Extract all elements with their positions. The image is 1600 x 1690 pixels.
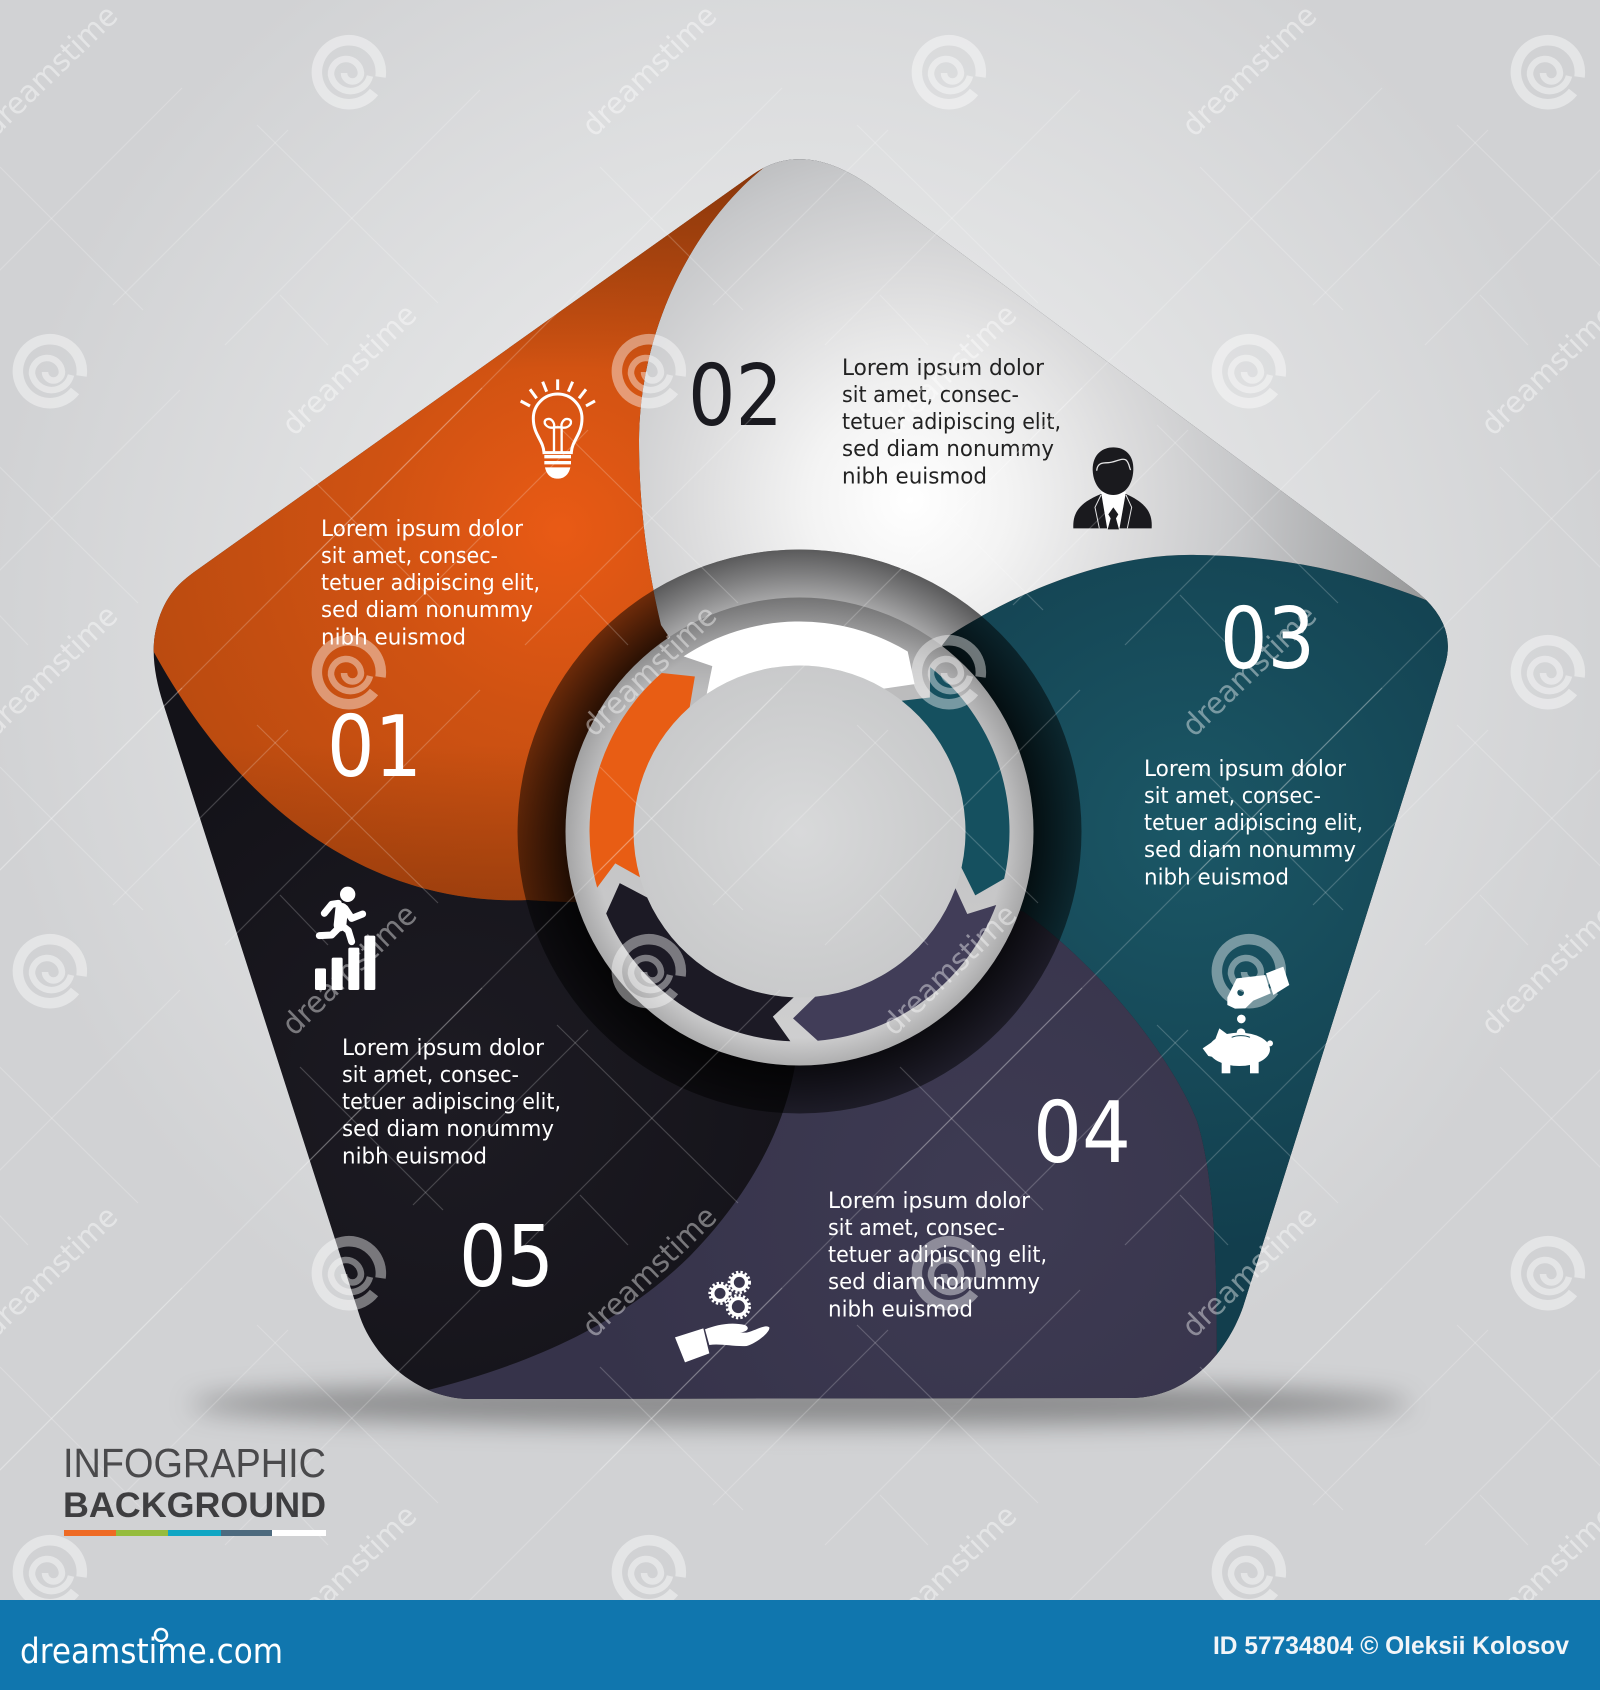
arrow: black xyxy=(583,875,812,1070)
watermark overlay: dreamstime xyxy=(275,897,424,1043)
number 04: 04 xyxy=(1033,1084,1131,1183)
text block 04: Lorem ipsum dolor xyxy=(828,1189,1031,1214)
watermark overlay: dreamstime xyxy=(275,1498,424,1644)
text block 01: Lorem ipsum dolor xyxy=(321,517,524,542)
text block 03: tetuer adipiscing elit, xyxy=(1144,811,1363,836)
icon: light bulb xyxy=(521,379,595,479)
number 03: 03 xyxy=(1220,590,1315,689)
watermark overlay: dreamstime xyxy=(575,1199,724,1345)
text block 02: tetuer adipiscing elit, xyxy=(842,410,1061,435)
arrow: white xyxy=(684,621,915,694)
text block 04: nibh euismod xyxy=(828,1298,973,1322)
pentagon shadow xyxy=(190,1382,1410,1426)
arrow: purple xyxy=(787,875,1017,1069)
text block 01: sed diam nonummy xyxy=(321,598,533,623)
watermark overlay: dreamstime xyxy=(275,297,424,443)
number 01: 01 xyxy=(327,698,422,797)
title: BACKGROUND xyxy=(63,1486,326,1525)
icon: piggy bank with hand xyxy=(1203,967,1289,1073)
text block 03: nibh euismod xyxy=(1144,866,1289,890)
text block 03 xyxy=(1144,757,1363,890)
text block 01: nibh euismod xyxy=(321,626,466,650)
watermark overlay: dreamstime xyxy=(875,897,1024,1043)
text block 05: sed diam nonummy xyxy=(342,1117,554,1142)
text block 01: sit amet, consec- xyxy=(321,544,498,569)
text block 05: sit amet, consec- xyxy=(342,1063,519,1088)
watermark overlay: dreamstime xyxy=(875,1498,1024,1644)
text block 05 xyxy=(342,1036,561,1170)
footer credit: ID 57734804 © Oleksii Kolosov xyxy=(1213,1632,1569,1660)
title xyxy=(63,1440,326,1525)
text block 01: tetuer adipiscing elit, xyxy=(321,571,540,596)
text block 02: nibh euismod xyxy=(842,464,987,490)
footer logo: dreamstime.com xyxy=(20,1632,283,1672)
arrow: teal xyxy=(895,656,1035,898)
icon: runner on bars xyxy=(315,887,375,990)
watermark overlay: dreamstime xyxy=(575,598,724,744)
number 02: 02 xyxy=(688,347,783,446)
text block 03: sed diam nonummy xyxy=(1144,838,1356,863)
arrow: orange xyxy=(564,657,704,899)
icon: businessman xyxy=(1073,447,1152,529)
text block 05: nibh euismod xyxy=(342,1144,487,1170)
footer band xyxy=(0,1600,1600,1690)
text block 04: sed diam nonummy xyxy=(828,1270,1040,1295)
text block 04: sit amet, consec- xyxy=(828,1216,1005,1241)
watermark overlay: dreamstime xyxy=(875,297,1024,443)
cycle arrows xyxy=(564,621,1035,1070)
text block 05: tetuer adipiscing elit, xyxy=(342,1090,561,1115)
text block 03: Lorem ipsum dolor xyxy=(1144,757,1347,782)
text block 01 xyxy=(321,517,540,650)
text block 02: sed diam nonummy xyxy=(842,437,1054,462)
title: INFOGRAPHIC xyxy=(63,1440,326,1486)
text block 05: Lorem ipsum dolor xyxy=(342,1036,545,1061)
text block 03: sit amet, consec- xyxy=(1144,784,1321,809)
text block 02: Lorem ipsum dolor xyxy=(842,356,1045,381)
center ring xyxy=(518,550,1082,1114)
number 05: 05 xyxy=(459,1208,554,1307)
text block 04: tetuer adipiscing elit, xyxy=(828,1243,1047,1268)
icon: hand with gears xyxy=(675,1272,769,1362)
watermark overlay: dreamstime xyxy=(1175,598,1324,744)
watermark overlay: dreamstime xyxy=(1175,1199,1324,1345)
pentagon infographic xyxy=(154,159,1448,1399)
text block 02 xyxy=(842,356,1061,490)
text block 02: sit amet, consec- xyxy=(842,383,1019,408)
text block 04 xyxy=(828,1189,1047,1322)
colour bar xyxy=(64,1530,326,1536)
panel: segment shapes xyxy=(154,159,1448,1399)
